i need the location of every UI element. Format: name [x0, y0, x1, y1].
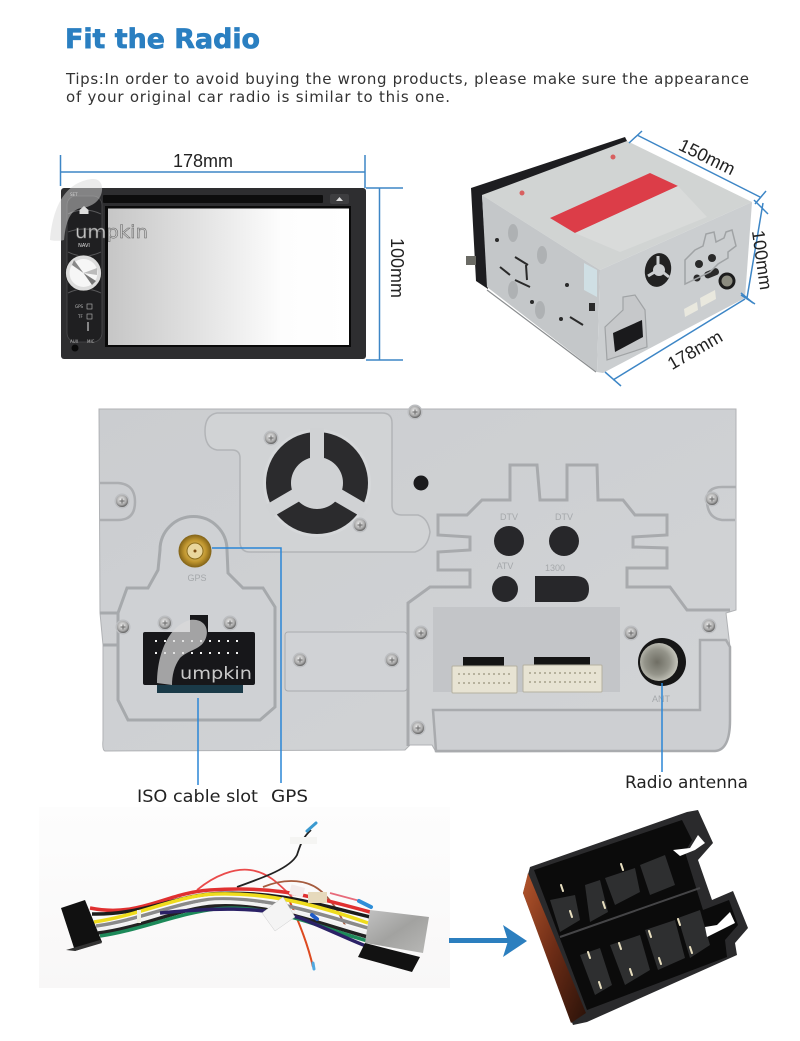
height label: 100mm — [748, 229, 776, 291]
rear face fan opening — [642, 251, 674, 289]
depth label: 150mm — [676, 135, 738, 179]
left control column: GPS — [75, 304, 84, 309]
length label: 178mm — [664, 326, 726, 374]
left control column: MIC — [87, 339, 95, 344]
tips text: Tips:In order to avoid buying the wrong products, please make sure the appearance — [65, 70, 749, 88]
wire bundle — [90, 889, 370, 946]
small cover plate — [285, 632, 407, 691]
GPS connector — [178, 534, 212, 568]
knob stub on left side — [466, 256, 476, 265]
height label: 100mm — [387, 238, 407, 298]
white connector right — [523, 657, 602, 692]
left side face — [482, 195, 600, 372]
callout: radio antenna — [625, 683, 748, 793]
metal pins — [561, 864, 692, 988]
wire tags — [262, 837, 327, 931]
callout: ISO cable slot — [137, 698, 258, 807]
fan plate outline — [205, 413, 430, 552]
plug labels — [497, 512, 573, 573]
GPS stamp: GPS — [187, 573, 207, 583]
left control column: TF — [77, 314, 83, 319]
callout: radio antenna: Radio antenna — [625, 773, 748, 793]
right screw notch — [707, 487, 736, 520]
left ledge lines — [100, 613, 118, 645]
GPS recess — [118, 516, 275, 720]
depth dimension line — [629, 131, 766, 204]
title: Fit the Radio — [65, 24, 260, 55]
socket cells — [550, 855, 710, 995]
left control column: NAVI — [78, 243, 90, 249]
rear face — [597, 202, 752, 373]
mounting hole — [414, 476, 428, 490]
ISO watermark logo: umpkin — [180, 664, 252, 684]
tips text — [65, 70, 749, 106]
photo: wiring harness — [39, 807, 450, 988]
right harness plug — [358, 910, 429, 972]
lower L lip — [433, 640, 730, 751]
volume knob — [66, 255, 102, 291]
side face details — [487, 224, 597, 372]
rear face cross recess — [685, 230, 736, 284]
eject button — [330, 194, 349, 204]
photo: ISO connector close-up — [523, 810, 748, 1025]
radio faceplate — [61, 188, 366, 359]
front view of radio with dimensions — [50, 151, 407, 360]
panel: rear plate of radio — [99, 404, 736, 752]
connector interior — [534, 820, 738, 1010]
ISO watermark logo — [157, 620, 252, 685]
rear face plugs — [694, 254, 720, 282]
top face — [482, 140, 752, 270]
antenna socket — [638, 638, 686, 686]
video plugs — [492, 526, 589, 602]
fan opening — [263, 428, 371, 537]
plug labels: DTV — [500, 512, 518, 522]
length dimension line — [605, 293, 753, 386]
touch screen — [105, 206, 351, 347]
plug labels: ATV — [497, 561, 513, 571]
left control column — [67, 192, 102, 352]
zip tie — [137, 910, 141, 923]
3D view of radio with dimensions — [466, 131, 776, 386]
top screws — [520, 154, 616, 196]
photo background — [39, 807, 450, 988]
wire terminals — [307, 823, 371, 969]
width dimension line — [60, 155, 365, 188]
height dimension line — [741, 200, 768, 304]
ISO socket on radio — [143, 615, 255, 693]
callout: ISO cable slot: ISO cable slot — [137, 787, 258, 807]
brown side — [523, 873, 586, 1023]
left control column: SET — [70, 192, 78, 197]
rear face antenna — [718, 272, 736, 290]
height dimension line — [366, 188, 403, 360]
disc slot — [103, 195, 323, 203]
arrow — [449, 925, 527, 957]
rear face GPS connector — [624, 299, 634, 309]
grey label — [575, 186, 707, 252]
watermark logo: umpkin — [75, 222, 148, 243]
divider — [560, 888, 700, 937]
plug labels: 1300 — [545, 563, 565, 573]
cross recess — [408, 465, 730, 746]
left control column: AUX — [70, 339, 79, 344]
callout: GPS: GPS — [271, 787, 308, 807]
left harness plug — [61, 900, 102, 951]
panel screws — [114, 404, 720, 736]
clip notches — [673, 835, 735, 937]
plug labels: DTV — [555, 512, 573, 522]
left screw notch — [100, 483, 135, 520]
tips text: of your original car radio is similar to this one. — [66, 88, 450, 106]
black front bezel — [471, 137, 627, 289]
red label — [550, 173, 678, 233]
fan screws — [264, 430, 368, 532]
rear face white connectors — [684, 290, 716, 317]
white connector left — [452, 657, 517, 693]
width label: 178mm — [173, 151, 233, 171]
connector body — [523, 810, 748, 1025]
dark connector bay — [433, 607, 620, 692]
watermark logo — [50, 179, 148, 243]
thin wires — [197, 830, 360, 967]
plate body — [99, 409, 736, 752]
rear face ISO connector — [605, 295, 647, 360]
antenna label: ANT — [652, 694, 671, 704]
callout: GPS — [212, 548, 308, 807]
